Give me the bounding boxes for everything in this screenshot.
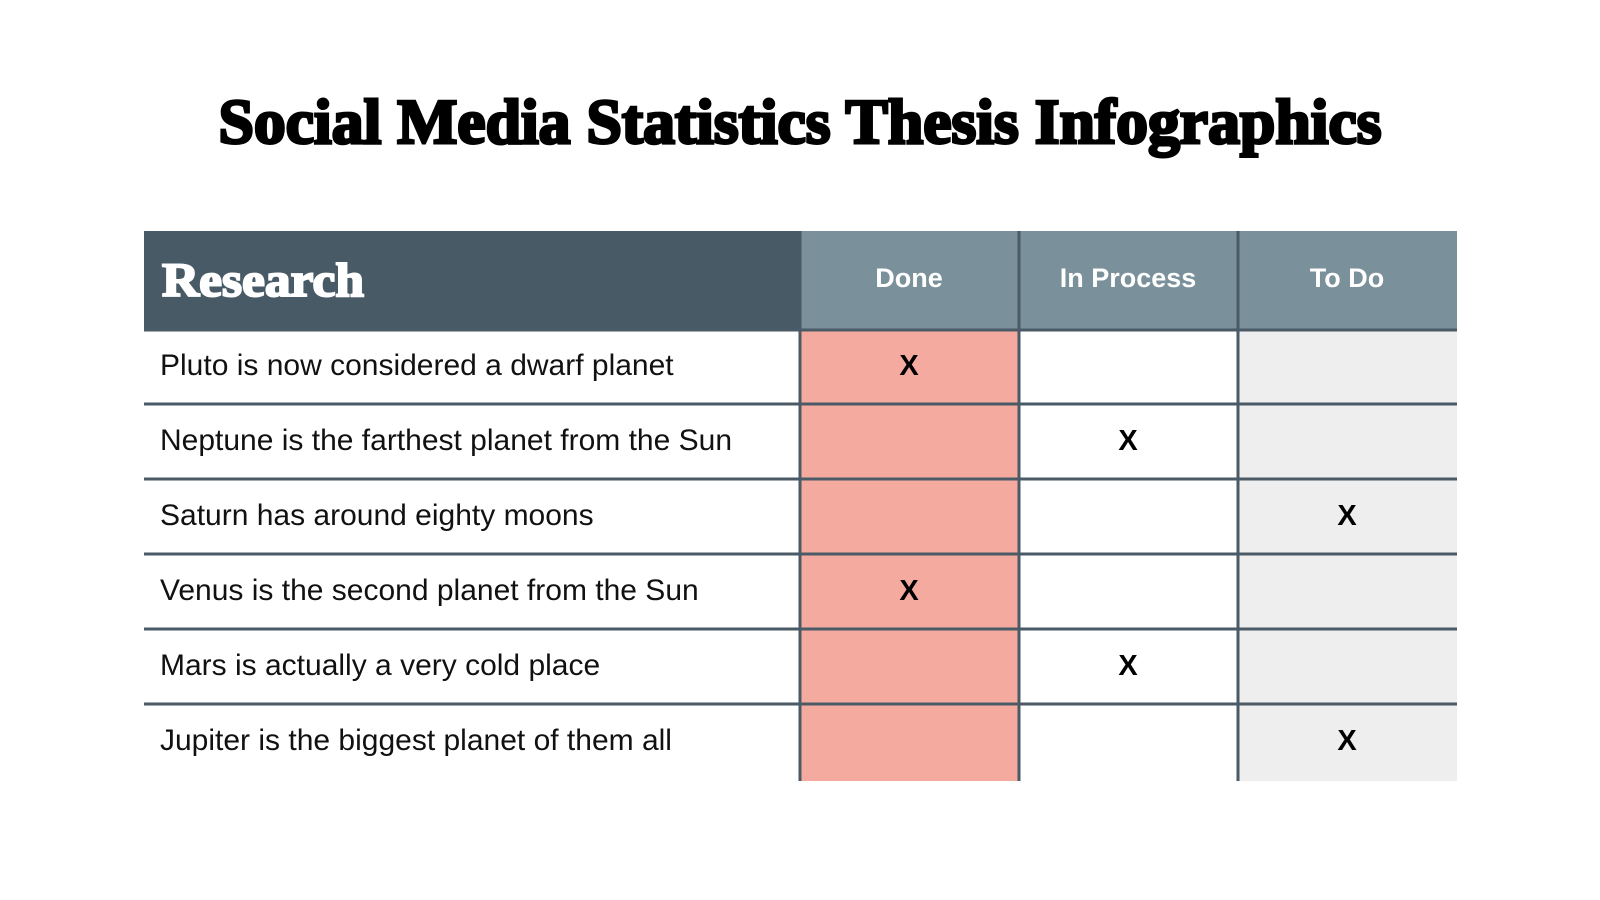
row labels: Saturn has around eighty moons bbox=[160, 499, 594, 532]
row labels: Jupiter is the biggest planet of them all bbox=[160, 724, 672, 757]
check marks: X bbox=[1337, 725, 1357, 757]
row labels: Venus is the second planet from the Sun bbox=[160, 574, 699, 607]
check marks: X bbox=[1118, 650, 1138, 682]
row labels: Pluto is now considered a dwarf planet bbox=[160, 349, 674, 382]
header: status columns bbox=[800, 231, 1457, 330]
row labels: Mars is actually a very cold place bbox=[160, 649, 600, 682]
title: Social Media Statistics Thesis Infographics bbox=[218, 86, 1382, 157]
row labels: Neptune is the farthest planet from the Sun bbox=[160, 424, 732, 457]
check marks bbox=[899, 350, 1357, 757]
header: status columns: Done bbox=[875, 263, 943, 293]
header: status columns: In Process bbox=[1060, 263, 1196, 293]
column fills bbox=[800, 330, 1457, 781]
check marks: X bbox=[899, 350, 919, 382]
row labels bbox=[160, 349, 732, 757]
header: research: Research bbox=[162, 254, 364, 307]
check marks: X bbox=[1118, 425, 1138, 457]
table bbox=[144, 231, 1457, 781]
check marks: X bbox=[899, 575, 919, 607]
header: status columns: To Do bbox=[1310, 263, 1384, 293]
grid lines bbox=[144, 231, 1457, 781]
check marks: X bbox=[1337, 500, 1357, 532]
header: research bbox=[144, 231, 800, 330]
